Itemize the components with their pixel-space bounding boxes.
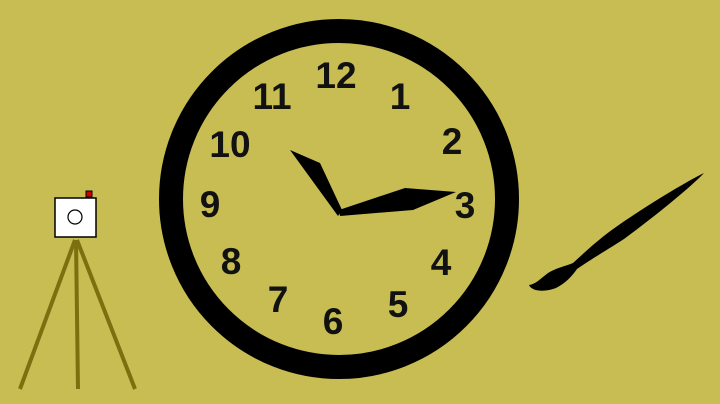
clock numbers: 6 xyxy=(323,301,343,342)
hour hand xyxy=(290,150,342,216)
icon: paintbrush xyxy=(529,173,704,291)
clock numbers: 1 xyxy=(390,76,410,117)
clock numbers: 9 xyxy=(200,184,220,225)
clock numbers: 8 xyxy=(221,241,241,282)
tripod xyxy=(20,240,135,389)
minute hand xyxy=(339,188,456,216)
camera on tripod xyxy=(20,191,135,389)
clock numbers: 4 xyxy=(431,242,452,283)
clock numbers: 5 xyxy=(388,284,408,325)
clock numbers: 12 xyxy=(315,55,357,96)
clock numbers xyxy=(200,55,475,342)
clock numbers: 11 xyxy=(252,76,292,117)
clock numbers: 10 xyxy=(209,124,251,165)
clock xyxy=(171,31,507,367)
clock numbers: 3 xyxy=(455,185,475,226)
camera body xyxy=(55,198,96,237)
clock numbers: 2 xyxy=(442,121,462,162)
clock ring xyxy=(171,31,507,367)
clock numbers: 7 xyxy=(268,279,288,320)
